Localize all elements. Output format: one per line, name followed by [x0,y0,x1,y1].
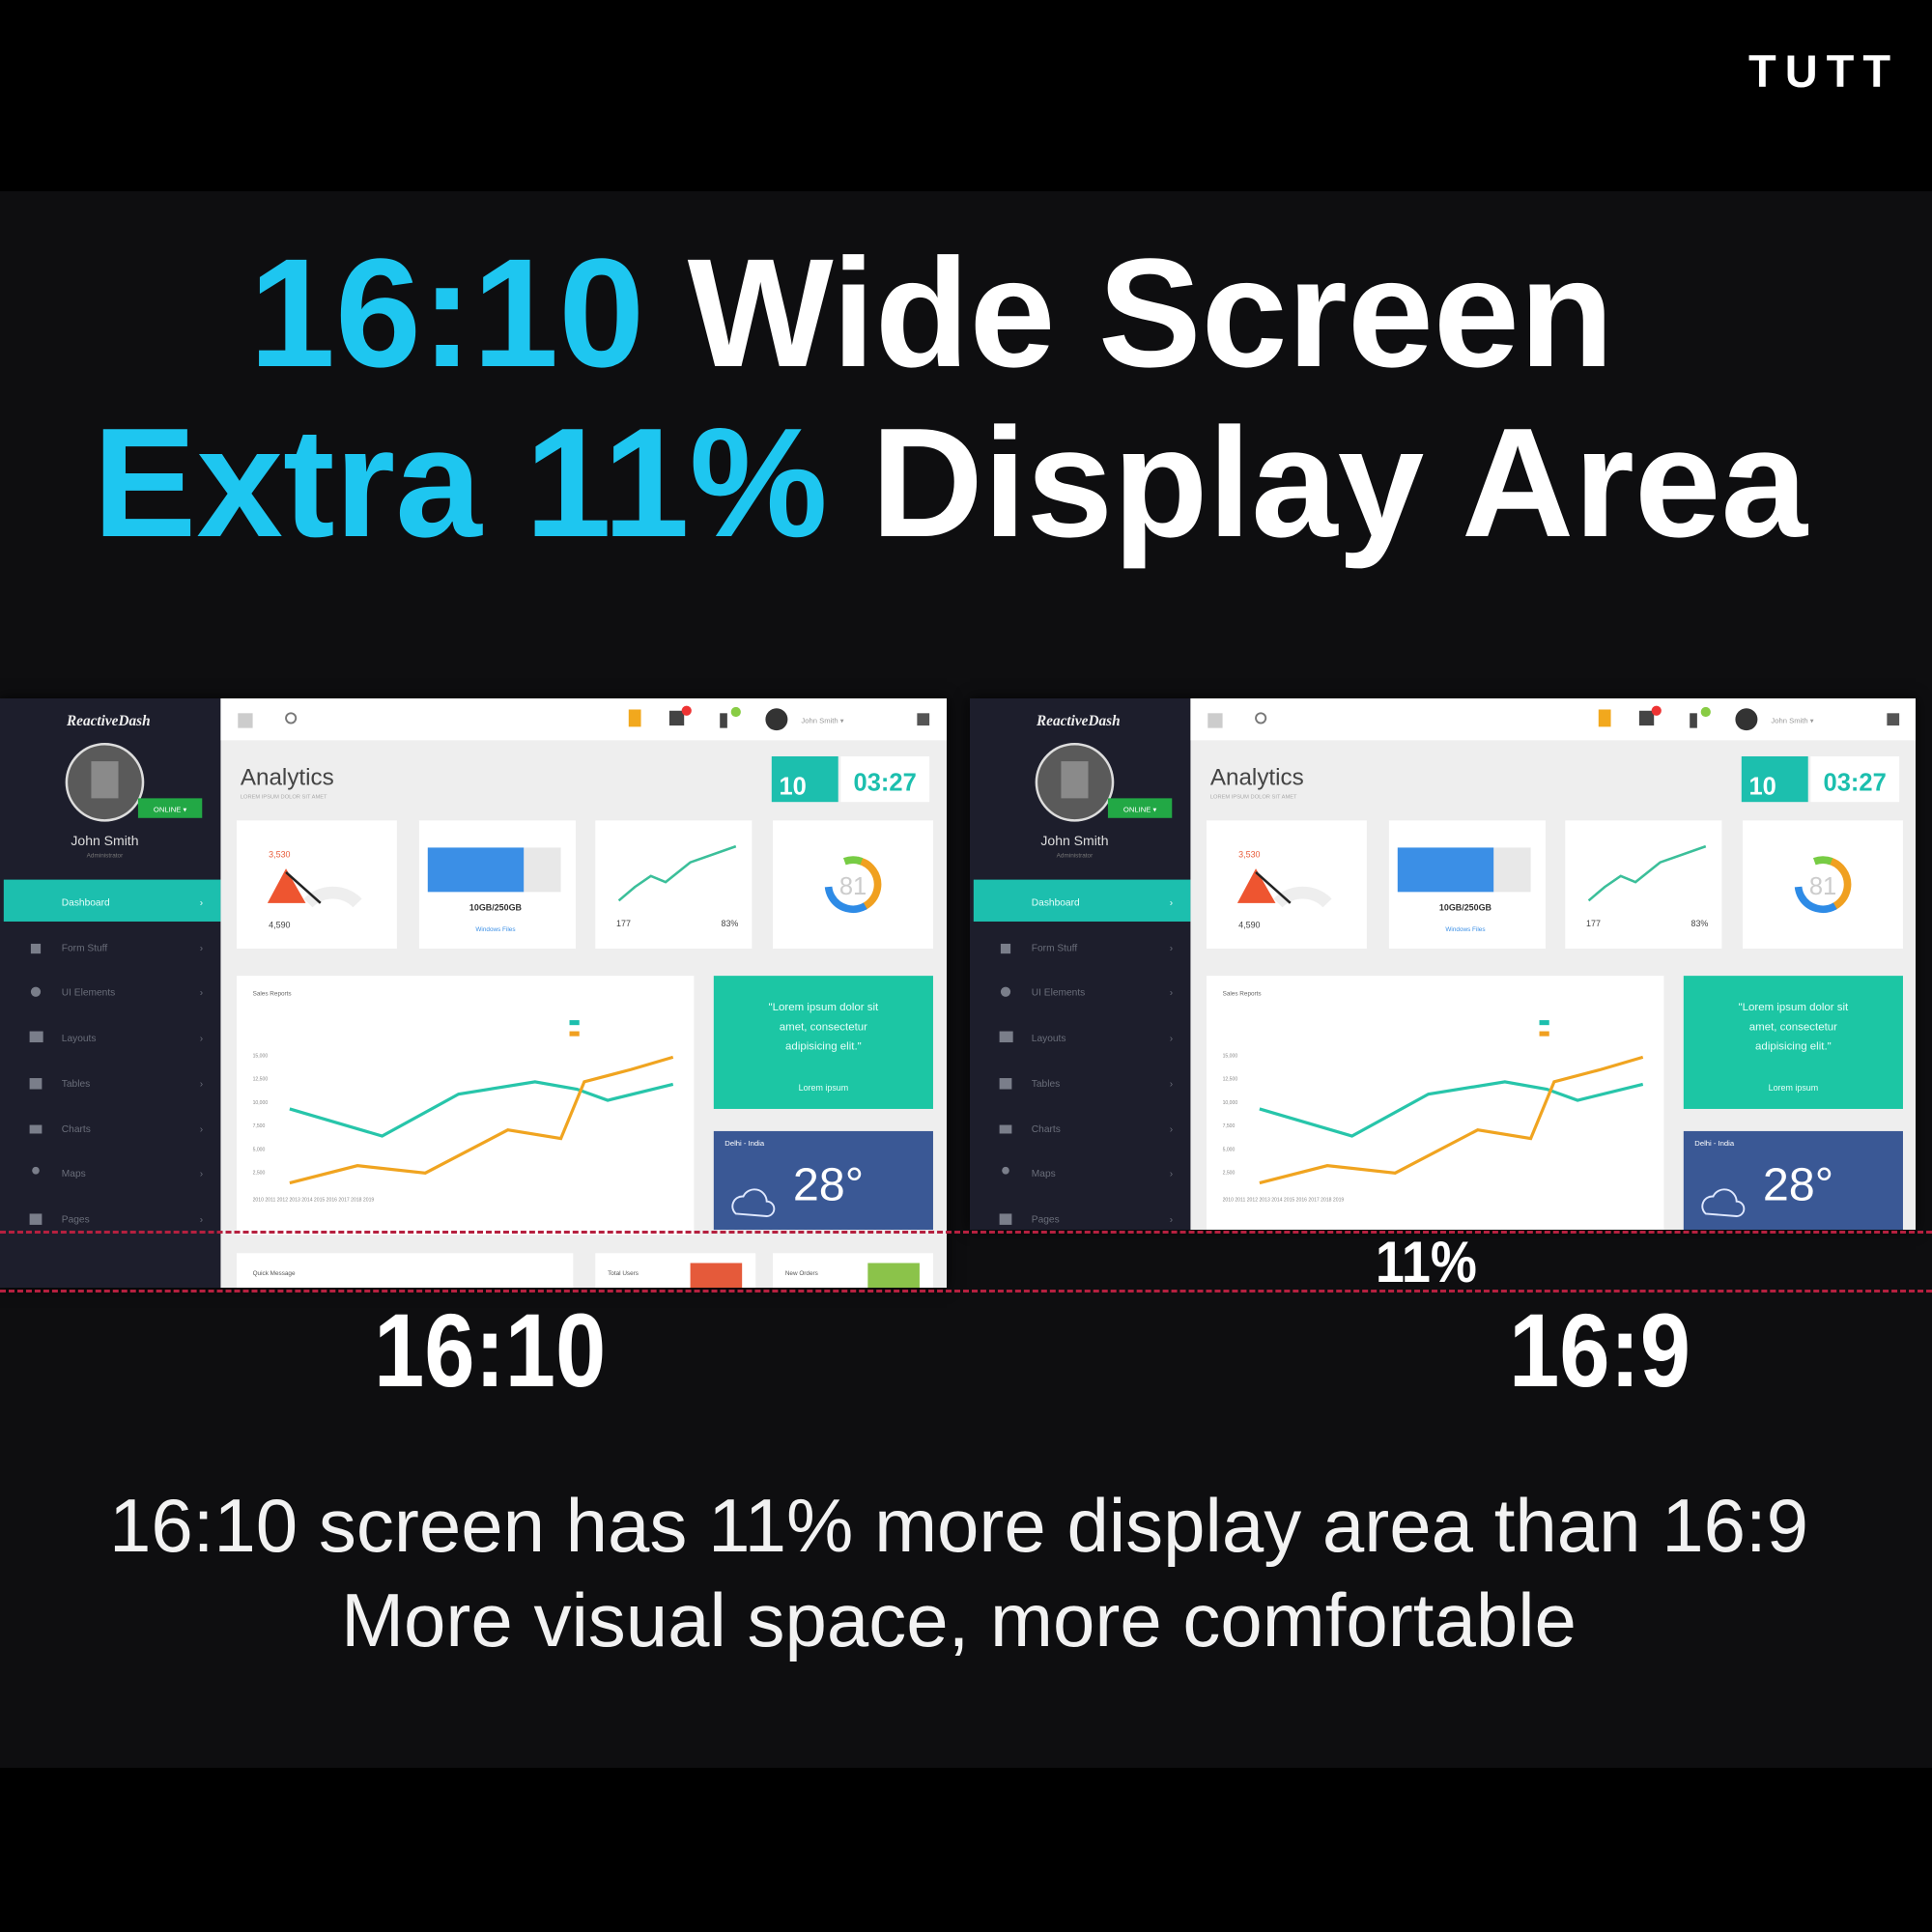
panel: 16:10 dashboard screenshot: UI Elements [62,988,115,999]
title line 1: 16:10 Wide Screen [249,226,1614,399]
panel: 16:10 dashboard screenshot: Administrator [87,853,124,860]
panel: 16:10 dashboard screenshot: Lorem ipsum [799,1083,848,1093]
panel: 16:10 dashboard screenshot: adipisicing elit." [785,1041,862,1053]
panel: 16:10 dashboard screenshot: Layouts [62,1034,96,1044]
caption text: More visual space, more comfortable [341,1577,1577,1662]
panel: 16:10 dashboard screenshot: ONLINE ▾ [154,805,186,813]
panel: 16:10 dashboard screenshot: 177 [616,919,631,928]
panel: 16:10 dashboard screenshot: Sales Reports [253,991,292,998]
label: 16:9: 16:9 [1509,1292,1690,1408]
panel: 16:10 dashboard screenshot: amet, consectetur [780,1021,867,1033]
panel: 16:10 dashboard screenshot: ReactiveDash [66,713,151,729]
panel: 16:10 dashboard screenshot: Analytics [241,764,334,790]
label: 11% difference: 11% [1376,1230,1477,1294]
panel: 16:10 dashboard screenshot: Maps [62,1169,86,1179]
panel: 16:10 dashboard screenshot: 10 [779,774,807,801]
panel: 16:10 dashboard screenshot: Dashboard [62,897,110,908]
caption text [109,1483,1808,1662]
panel: 16:10 dashboard screenshot: 3,530 [269,850,291,860]
panel: 16:10 dashboard screenshot: › [200,1124,203,1135]
panel: 16:10 dashboard screenshot: 7,500 [253,1123,266,1129]
panel: 16:10 dashboard screenshot: › [200,1169,203,1179]
panel: 16:10 dashboard screenshot: 15,000 [253,1053,268,1059]
logo: TUTT: TUTT [1748,45,1899,97]
panel: 16:10 dashboard screenshot: 4,590 [269,920,291,929]
label: 16:10: 16:10 [374,1292,606,1408]
panel: 16:10 dashboard screenshot: › [200,988,203,999]
panel: 16:10 dashboard screenshot: › [200,1214,203,1225]
panel: 16:10 dashboard screenshot: 5,000 [253,1147,266,1152]
panel: 16:10 dashboard screenshot: 2,500 [253,1171,266,1177]
panel: 16:10 dashboard screenshot: 10GB/250GB [469,902,523,912]
panel: 16:10 dashboard screenshot: Total Users [608,1270,639,1277]
panel: 16:10 dashboard screenshot: › [200,1079,203,1090]
panel: 16:10 dashboard screenshot: 10,000 [253,1100,268,1106]
panel: 16:10 dashboard screenshot: New Orders [785,1270,818,1277]
title line 2: Extra 11% Display Area [93,396,1807,570]
panel: 16:10 dashboard screenshot: 83% [721,919,738,928]
panel: 16:10 dashboard screenshot: Form Stuff [62,944,107,954]
panel: 16:10 dashboard screenshot: Windows Files [475,926,516,933]
panel: 16:10 dashboard screenshot: Quick Message [253,1270,296,1277]
panel: 16:10 dashboard screenshot: 81 [839,873,867,900]
panel: 16:10 dashboard screenshot: › [200,897,203,908]
panel: 16:10 dashboard screenshot: › [200,944,203,954]
caption text: 16:10 screen has 11% more display area than 16:9 [109,1483,1808,1568]
panel: 16:9 dashboard screenshot [970,698,1916,1230]
panel: 16:10 dashboard screenshot: Delhi - India [724,1139,765,1148]
panel: 16:10 dashboard screenshot: 03:27 [854,770,917,797]
panel: 16:10 dashboard screenshot: LOREM IPSUM DOLOR SIT AMET [241,794,327,800]
panel: 16:10 dashboard screenshot: 2010 2011 2012 2013 2014 2015 2016 2017 2018 2019 [253,1198,374,1204]
panel: 16:10 dashboard screenshot: Charts [62,1124,91,1135]
panel: 16:10 dashboard screenshot: › [200,1034,203,1044]
panel: 16:10 dashboard screenshot: Pages [62,1214,90,1225]
panel: 16:10 dashboard screenshot: John Smith [71,833,139,848]
panel: 16:10 dashboard screenshot: John Smith ▾ [801,717,844,725]
panel: 16:10 dashboard screenshot: Tables [62,1079,90,1090]
panel: 16:10 dashboard screenshot [0,698,947,1288]
panel: 16:10 dashboard screenshot: "Lorem ipsum dolor sit [769,1002,879,1013]
panel: 16:10 dashboard screenshot: 12,500 [253,1077,268,1083]
panel: 16:10 dashboard screenshot: 28° [793,1158,864,1210]
